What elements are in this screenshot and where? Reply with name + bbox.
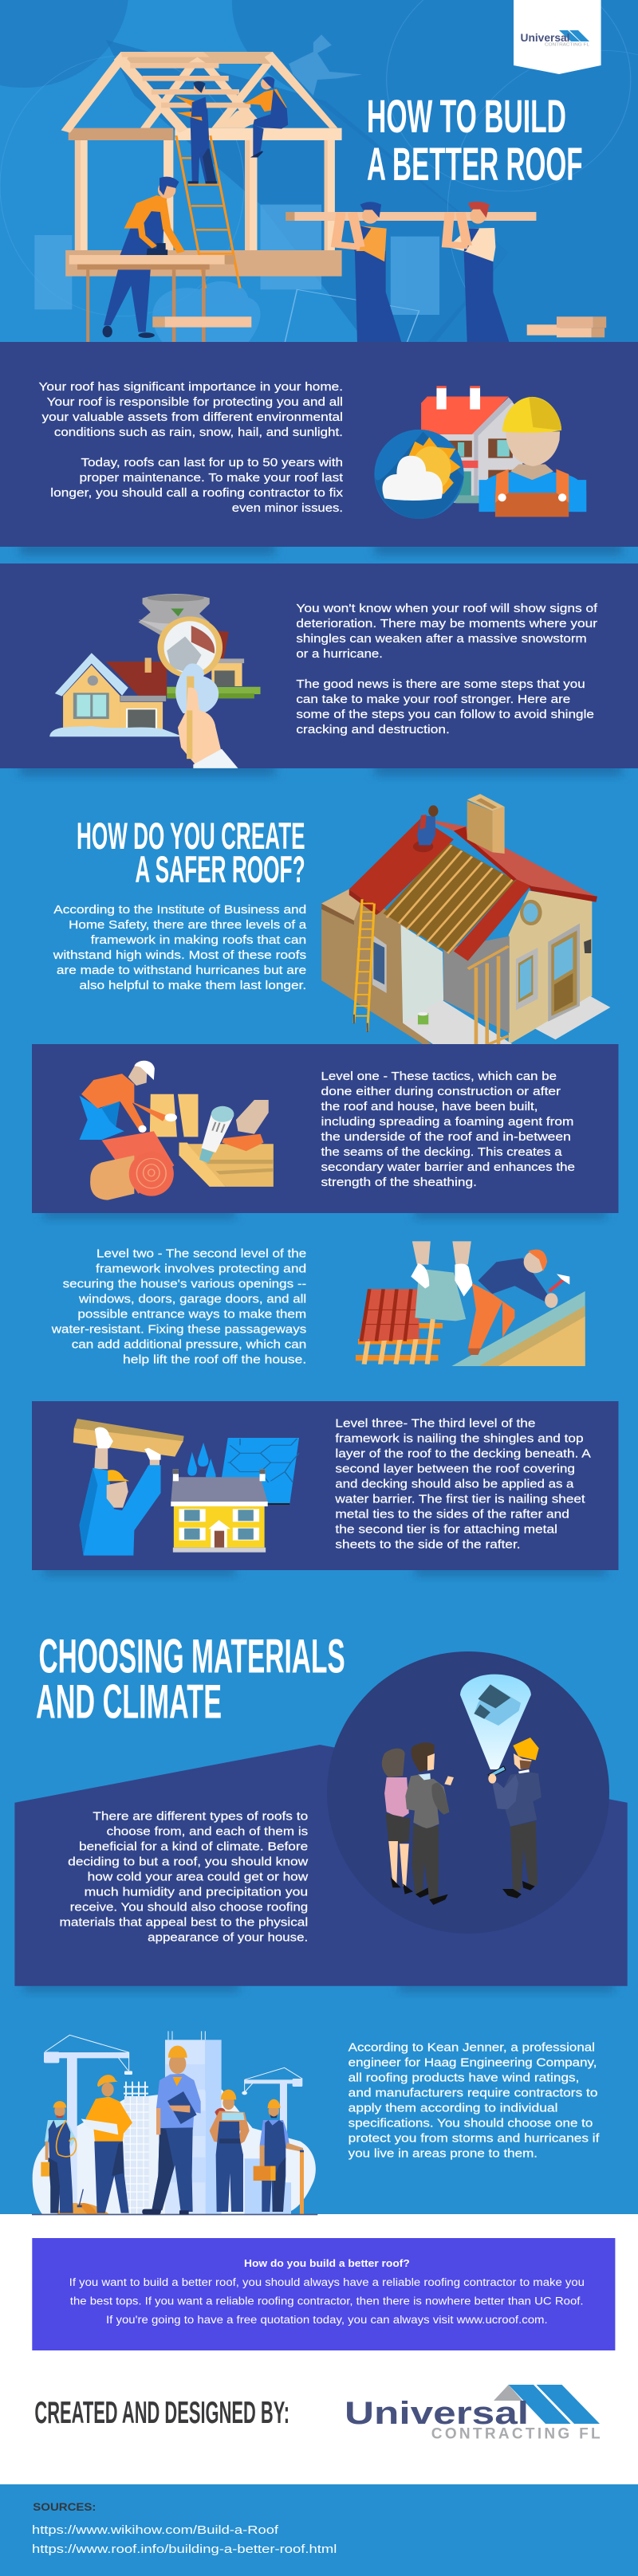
section text: Kean Jenner: and manufacturers require contractors to [349, 2087, 598, 2100]
deterioration text: some of the steps you can follow to avoid shingle [296, 709, 594, 721]
section text: Kean Jenner [349, 2042, 601, 2161]
intro text [38, 381, 344, 515]
deterioration text: The good news is there are some steps that you [296, 678, 585, 691]
footer: sources: SOURCES: [33, 2500, 96, 2513]
logo ribbon: Universal [520, 31, 569, 44]
safer roof text: are made to withstand hurricanes but are [57, 964, 306, 977]
heading: choosing materials and climate [36, 1629, 345, 1728]
icon: worker lifting board with house [73, 1419, 299, 1556]
materials text: appearance of your house. [148, 1932, 308, 1945]
small roofer [413, 805, 438, 852]
icon: worker laying insulation and foam gun [79, 1061, 274, 1200]
men [405, 1738, 542, 1905]
safer roof text: framework in making roofs that can [91, 934, 306, 947]
shadow under level three [44, 1567, 606, 1575]
section text: Kean Jenner: engineer for Haag Engineering Company, [349, 2057, 597, 2070]
worker 5 [254, 2099, 304, 2214]
icon: storm house under magnifying glass [49, 594, 261, 768]
level one text: the roof and house, have been built, [321, 1101, 538, 1113]
hero header illustration [0, 0, 638, 375]
deterioration text: You won't know when your roof will show signs of [296, 603, 598, 615]
shadow under level one [44, 1210, 606, 1218]
level one text: including spreading a foaming agent from [321, 1116, 573, 1129]
background windows [34, 205, 439, 343]
callout: conclusion box: the best tops. If you want a reliable roofing contractor, then there is nowhere better than UC Roof. [70, 2295, 584, 2307]
dark circle backdrop [327, 1651, 609, 1934]
level three text: second layer between the roof covering [335, 1463, 575, 1476]
section text: Kean Jenner: all roofing products have wind ratings, [349, 2072, 579, 2085]
safer roof text: Home Safety, there are three levels of a [69, 919, 307, 932]
level two text: possible entrance ways to make them [77, 1309, 306, 1321]
heading: choosing materials and climate: CHOOSING MATERIALS [38, 1629, 345, 1683]
level three text: metal ties to the sides of the rafter and [335, 1509, 569, 1522]
woman [382, 1749, 413, 1895]
intro text: Today, roofs can last for up to 50 years with [81, 457, 343, 469]
intro text: longer, you should call a roofing contractor to fix [50, 487, 344, 500]
heading: how do you create a safer roof: A SAFER ROOF? [135, 848, 305, 890]
worker on ladder [175, 81, 217, 184]
intro text: even minor issues. [232, 502, 343, 515]
house frame [61, 52, 342, 277]
level one text: Level one - These tactics, which can be [321, 1070, 557, 1083]
intro text: proper maintenance. To make your roof last [80, 472, 343, 485]
level three text [334, 1418, 591, 1552]
worker 4 [210, 2090, 250, 2212]
level one text: the underside of the roof and in-between [321, 1131, 571, 1144]
worker 2 [81, 2075, 132, 2213]
worker 3 [142, 2046, 201, 2214]
materials text: There are different types of roofs to [93, 1811, 308, 1824]
materials text: how cold your area could get or how [88, 1871, 309, 1884]
materials text: materials that appeal best to the physical [59, 1917, 308, 1930]
materials text: choose from, and each of them is [107, 1826, 308, 1839]
created and designed by: CREATED AND DESIGNED BY: [34, 2396, 289, 2430]
logo: Universal Contracting FL: Universal [345, 2396, 529, 2431]
icon: worker, house and weather [374, 386, 586, 519]
panel: materials and climate [14, 1651, 628, 1986]
logo: Universal Contracting FL: CONTRACTING FL [431, 2425, 601, 2442]
deterioration text [296, 603, 598, 736]
callout: conclusion box: If you're going to have a free quotation today, you can always visit www.ucroof.com. [106, 2314, 548, 2326]
deterioration text: or a hurricane. [296, 648, 383, 661]
shadow under materials panel [24, 1983, 614, 1991]
logo ribbon [514, 0, 601, 74]
safer roof text [53, 904, 307, 992]
level two text: water-resistant. Fixing these passageways [51, 1324, 306, 1337]
callout: conclusion box: How do you build a better roof? [244, 2257, 410, 2269]
illustration: isometric house with open roof [321, 794, 610, 1044]
intro text: Your roof is responsible for protecting you and all [47, 396, 343, 409]
intro text: your valuable assets from different environmental [41, 411, 343, 424]
level two text: Level two - The second level of the [96, 1248, 306, 1261]
section text: Kean Jenner: protect you from storms and hurricanes if [349, 2133, 601, 2146]
title: how to build a better roof [367, 91, 583, 190]
level two text: framework involves protecting and [96, 1263, 306, 1276]
deterioration text: shingles can weaken after a massive snowstorm [296, 633, 587, 646]
level two text: securing the house's various openings -- [63, 1278, 306, 1291]
safer roof text: According to the Institute of Business and [53, 904, 306, 917]
level three text: and decking should also be applied as a [335, 1478, 574, 1491]
footer: sources: https://www.wikihow.com/Build-a-Roof [32, 2524, 279, 2537]
wood planks [152, 316, 606, 337]
panel: deterioration [0, 564, 638, 768]
level two text [51, 1248, 306, 1367]
ladder [176, 135, 240, 289]
materials text: much humidity and precipitation you [85, 1887, 308, 1899]
safer roof text: also helpful to make them last longer. [80, 980, 306, 992]
heading: choosing materials and climate: AND CLIMATE [36, 1675, 222, 1728]
section text: Kean Jenner: you live in areas prone to them. [349, 2148, 538, 2161]
ghost worker [289, 34, 362, 96]
work table [69, 255, 234, 343]
safer roof text: withstand high winds. Most of these roofs [53, 949, 306, 962]
level one text [321, 1070, 575, 1189]
deterioration text: cracking and destruction. [296, 724, 450, 736]
callout: conclusion box: If you want to build a better roof, you should always have a reliable roofing contractor to make you [69, 2276, 585, 2288]
workers carrying plank [286, 202, 536, 343]
panel: intro [0, 342, 638, 547]
level one text: done either during construction or after [321, 1086, 561, 1098]
level two text: windows, doors, garage doors, and all [78, 1294, 306, 1306]
level three text: sheets to the side of the rafter. [335, 1539, 521, 1552]
heading: how do you create a safer roof: HOW DO YOU CREATE [77, 815, 305, 857]
illustration: hologram house beam [460, 1675, 531, 1769]
worker at work table [103, 177, 181, 338]
illustration: construction team [32, 2031, 317, 2215]
materials text [59, 1811, 309, 1945]
section text: Kean Jenner: apply them according to individual [349, 2103, 558, 2115]
intro text: conditions such as rain, snow, hail, and sunlight. [54, 426, 343, 439]
panel: level one [32, 1044, 619, 1213]
section text: Kean Jenner: According to Kean Jenner, a professional [349, 2042, 595, 2055]
worker seated on beam [244, 77, 288, 157]
level three text: the second tier is for attaching metal [335, 1524, 557, 1537]
level two text: can add additional pressure, which can [72, 1339, 306, 1352]
level one text: the seams of the decking. This creates a [321, 1146, 563, 1159]
icon: roofer hammering, tiles and barrier sheet [356, 1241, 585, 1366]
panel: level three [32, 1401, 619, 1570]
heading: how do you create a safer roof [77, 815, 305, 890]
intro text: Your roof has significant importance in your home. [38, 381, 343, 394]
deterioration text: can take to make your roof stronger. Here are [296, 693, 570, 706]
footer: sources [0, 2484, 638, 2576]
logo: Universal Contracting FL [345, 2385, 601, 2442]
materials text: deciding to but a roof, you should know [68, 1856, 309, 1869]
materials text: beneficial for a kind of climate. Before [79, 1841, 308, 1854]
level three text: water barrier. The first tier is nailing sheet [334, 1494, 585, 1506]
level three text: layer of the roof to the decking beneath. A [335, 1448, 591, 1461]
level one text: strength of the sheathing. [321, 1176, 477, 1189]
worker 1 [41, 2101, 76, 2213]
level three text: Level three- The third level of the [335, 1418, 535, 1431]
shadow under panel 2 [20, 765, 622, 775]
level two text: help lift the roof off the house. [123, 1354, 306, 1367]
section text: Kean Jenner: specifications. You should choose one to [349, 2118, 593, 2130]
callout: conclusion box [32, 2238, 615, 2350]
materials text: receive. You should also choose roofing [70, 1902, 308, 1914]
footer: sources: https://www.roof.info/building-a-better-roof.html [32, 2543, 337, 2556]
logo ribbon: CONTRACTING FL [545, 43, 589, 48]
level one text: secondary water barrier and enhances the [321, 1161, 575, 1174]
shadow under panel 1 [20, 544, 622, 554]
deterioration text: deterioration. There may be moments where your [296, 618, 597, 630]
level three text: framework is nailing the shingles and top [335, 1433, 584, 1446]
